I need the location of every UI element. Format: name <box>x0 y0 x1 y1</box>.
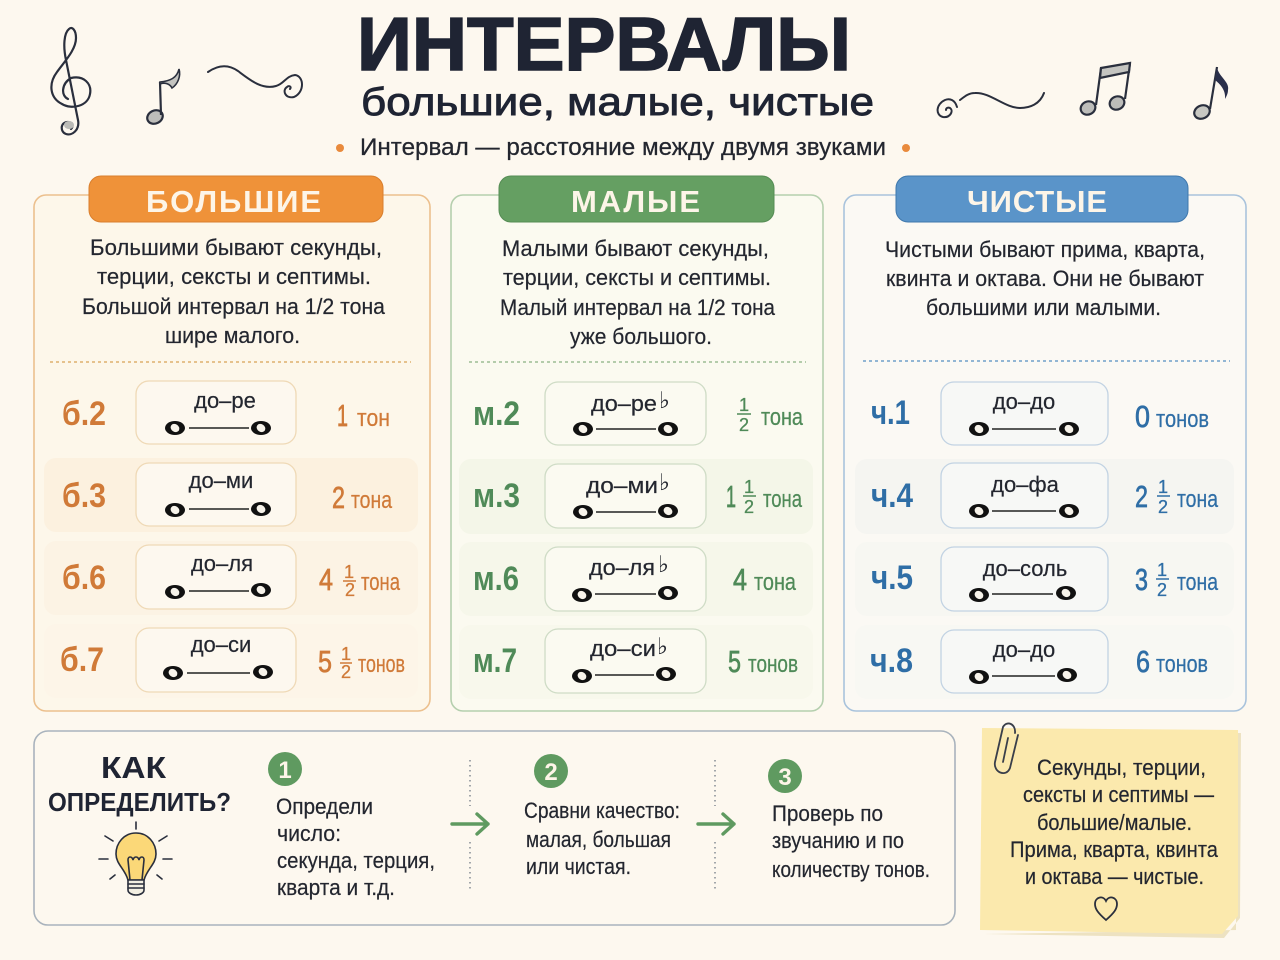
row: ч.1: тонов <box>1156 406 1209 433</box>
step 2: или чистая. <box>526 854 631 879</box>
row: м.6 <box>473 547 797 611</box>
text block: note: большие/малые. <box>1037 810 1192 835</box>
row: ч.1 <box>871 382 1209 445</box>
subtitle: большие, малые, чистые <box>361 81 874 124</box>
arrow: step 1 to step 2 <box>452 814 488 834</box>
row: м.2: тона <box>761 404 804 431</box>
row: ч.8: тонов <box>1156 651 1208 678</box>
row: м.3: м.3 <box>473 477 520 515</box>
row: ч.4: 1 <box>1158 477 1168 497</box>
row: ч.4: до–фа <box>991 472 1060 497</box>
row: б.2: б.2 <box>62 395 106 433</box>
text block: большие definition <box>82 235 386 348</box>
row: м.3: ♭ <box>659 470 670 496</box>
row: б.7: 2 <box>341 662 351 682</box>
icon: light bulb <box>99 822 172 895</box>
text block: чистые definition: Чистыми бывают прима, кварта, <box>885 237 1205 262</box>
step 3: количеству тонов. <box>772 857 930 882</box>
row: м.3: 1 <box>744 477 754 497</box>
row: ч.4: ч.4 <box>871 477 913 515</box>
row: ч.5: 1 <box>1157 560 1167 580</box>
row: б.7: 1 <box>341 644 351 664</box>
row: ч.8 <box>870 630 1208 693</box>
icon: beamed notes <box>1078 63 1130 117</box>
row: м.2: до–ре <box>591 391 657 416</box>
text block: большие definition: Большими бывают секунды, <box>90 235 382 260</box>
title: ИНТЕРВАЛЫ <box>357 2 851 86</box>
row: м.6: м.6 <box>473 560 519 598</box>
step 3: 3 <box>778 764 792 791</box>
heading: чистые <box>896 176 1188 222</box>
row: б.6: 4 <box>319 562 333 597</box>
step 1: секунда, терция, <box>277 848 435 873</box>
row: м.7: ♭ <box>657 634 668 660</box>
icon: squiggle left <box>208 66 302 97</box>
row: ч.5: до–соль <box>983 556 1067 581</box>
row: м.6: до–ля <box>589 555 655 580</box>
row: м.3: до–ми <box>586 473 658 498</box>
row: б.3: б.3 <box>62 477 106 515</box>
row: м.3: 2 <box>744 497 754 517</box>
row: б.3: до–ми <box>189 468 253 493</box>
text block: note: сексты и септимы — <box>1023 782 1214 807</box>
text block: note <box>1010 755 1219 889</box>
row: ч.1: 0 <box>1135 399 1150 434</box>
heading: чистые: ЧИСТЫЕ <box>967 184 1107 219</box>
icon: heart <box>1095 897 1117 920</box>
row: б.7 <box>60 628 405 692</box>
row: м.7: 5 <box>728 644 741 679</box>
icon: squiggle right <box>938 93 1044 117</box>
row: ч.5: тона <box>1177 569 1219 596</box>
row: ч.8: 6 <box>1136 644 1150 679</box>
row: м.3 <box>473 464 803 528</box>
row: б.2 <box>62 381 390 444</box>
heading: как определить: ОПРЕДЕЛИТЬ? <box>48 787 231 817</box>
text block: чистые definition: большими или малыми. <box>926 295 1161 320</box>
text block: большие definition: шире малого. <box>165 323 300 348</box>
row: б.6 <box>62 545 401 609</box>
step 2: Сравни качество: <box>524 798 680 823</box>
text block: note: Секунды, терции, <box>1037 755 1206 780</box>
row: м.2: 1 <box>739 395 749 415</box>
heading: как определить <box>48 750 231 817</box>
row: ч.4 <box>871 463 1219 528</box>
row: б.3: тона <box>351 487 393 514</box>
heading: большие: БОЛЬШИЕ <box>146 184 321 219</box>
text block: малые definition <box>500 236 776 349</box>
row: б.6: 2 <box>345 580 355 600</box>
text block: note: Прима, кварта, квинта <box>1010 837 1219 862</box>
row: ч.5: ч.5 <box>871 559 913 597</box>
row: ч.8: ч.8 <box>870 642 913 680</box>
text block: чистые definition: квинта и октава. Они не бывают <box>886 266 1204 291</box>
row: м.2: м.2 <box>473 395 520 433</box>
step 1 <box>268 752 435 900</box>
text block: малые definition: Малый интервал на 1/2 тона <box>500 295 776 320</box>
row: ч.8: до–до <box>993 637 1055 662</box>
row: б.3 <box>62 463 393 526</box>
row: м.2: 2 <box>739 415 749 435</box>
row: ч.1: ч.1 <box>871 394 910 432</box>
row: ч.5: 3 <box>1135 562 1148 597</box>
step 3: Проверь по <box>772 801 883 826</box>
definition line: Интервал — расстояние между двумя звуками <box>360 134 886 161</box>
row: ч.5 <box>871 547 1219 611</box>
row: б.6: 1 <box>344 562 354 582</box>
panel: как определить <box>34 731 955 925</box>
row: б.7: 5 <box>318 644 332 679</box>
row: ч.4: тона <box>1177 486 1219 513</box>
panel: большие <box>34 176 430 711</box>
row: б.6: до–ля <box>191 551 253 576</box>
row: б.2: до–ре <box>194 388 256 413</box>
step 1: кварта и т.д. <box>277 875 395 900</box>
row: м.6: 4 <box>733 562 747 597</box>
step 2: 2 <box>544 759 558 786</box>
text block: чистые definition <box>885 237 1205 320</box>
step 2 <box>524 754 680 879</box>
row: м.3: тона <box>763 486 803 513</box>
icon: eighth note right <box>1192 67 1228 121</box>
row: м.2: ♭ <box>659 388 670 414</box>
row: м.7: до–си <box>590 636 656 661</box>
row: ч.4: 2 <box>1135 479 1148 514</box>
row: м.6: ♭ <box>658 552 669 578</box>
step 1: 1 <box>278 757 292 784</box>
text block: большие definition: терции, сексты и септимы. <box>97 264 371 289</box>
icon: paperclip <box>995 723 1018 773</box>
arrow: step 2 to step 3 <box>698 814 734 834</box>
row: б.7: тонов <box>358 651 405 678</box>
step 2: малая, большая <box>526 827 671 852</box>
text block: малые definition: уже большого. <box>570 324 712 349</box>
row: б.3: 2 <box>332 480 345 515</box>
step 1: число: <box>277 821 341 846</box>
row: м.2 <box>473 382 804 445</box>
row: м.7: тонов <box>748 651 798 678</box>
row: б.7: б.7 <box>60 641 104 679</box>
row: ч.4: 2 <box>1158 497 1168 517</box>
row: м.6: тона <box>754 569 797 596</box>
text block: большие definition: Большой интервал на 1/2 тона <box>82 294 386 319</box>
row: б.6: тона <box>361 569 401 596</box>
row: б.6: б.6 <box>62 559 106 597</box>
panel: чистые <box>844 176 1246 711</box>
panel: малые <box>451 176 823 711</box>
icon: treble clef <box>51 28 90 134</box>
row: м.7 <box>473 629 798 693</box>
heading: малые <box>499 176 774 222</box>
heading: малые: МАЛЫЕ <box>571 184 700 219</box>
text block: note: и октава — чистые. <box>1025 864 1204 889</box>
callout: sticky note <box>980 723 1241 938</box>
step 3: звучанию и по <box>772 828 904 853</box>
row: б.2: 1 <box>337 398 348 433</box>
text block: малые definition: Малыми бывают секунды, <box>502 236 769 261</box>
row: м.7: м.7 <box>473 642 517 680</box>
heading: большие <box>89 176 383 222</box>
row: б.7: до–си <box>191 632 251 657</box>
row: м.3: 1 <box>726 479 736 514</box>
step 1: Определи <box>276 794 373 819</box>
text block: малые definition: терции, сексты и септимы. <box>503 265 771 290</box>
row: ч.1: до–до <box>993 389 1055 414</box>
step 3 <box>768 759 930 882</box>
heading: как определить: КАК <box>101 750 166 785</box>
row: б.2: тон <box>357 405 390 432</box>
icon: eighth note left <box>145 69 180 126</box>
row: ч.5: 2 <box>1157 580 1167 600</box>
